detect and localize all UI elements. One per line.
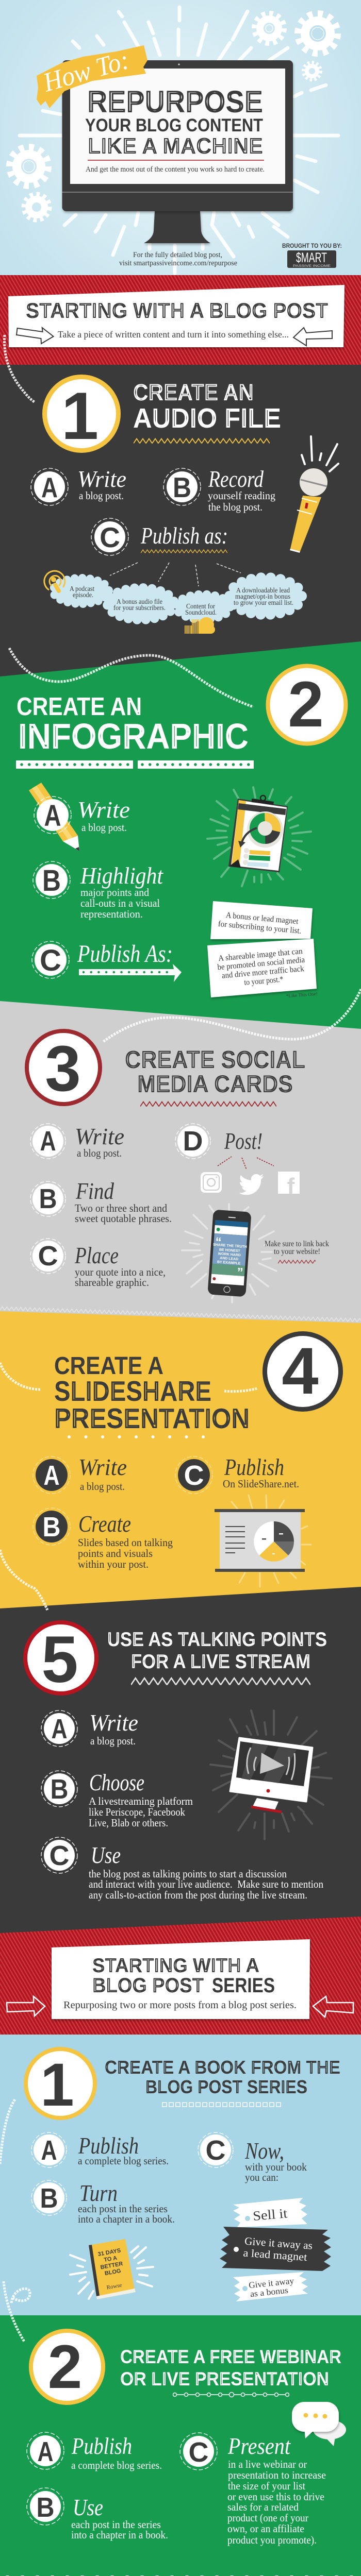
step C: use: any calls-to-action from the post during the live stream.: [89, 1889, 307, 1901]
heading: create a: CREATE A: [54, 1352, 163, 1380]
step A: write: [30, 1123, 124, 1159]
icon: smartphone with quote card: BY EXAMPLE: [217, 1260, 241, 1266]
icon: computer monitor: [62, 60, 293, 243]
heading: series: SERIES: [212, 1974, 275, 1997]
white banner card: [52, 1939, 310, 2019]
badge: number 1: [44, 377, 119, 453]
icon: smartphone with quote card: SHARE THE TRUTH: [213, 1243, 247, 1249]
step B: choose: A livestreaming platform: [89, 1795, 193, 1807]
heading: How To: How To:: [40, 45, 133, 98]
icon: soundcloud: [185, 617, 215, 634]
text: blog post link: [119, 251, 237, 267]
step B: create: Create: [78, 1511, 131, 1537]
step B: create: B: [42, 1512, 61, 1543]
step D: post: [175, 1124, 274, 1170]
step B: highlight: major points and: [80, 886, 149, 899]
step B: find: sweet quotable phrases.: [75, 1212, 172, 1225]
icon: small gear right: [303, 62, 321, 80]
step A: write: Write: [77, 796, 130, 823]
heading: audio file: AUDIO FILE: [133, 403, 281, 434]
icon: rays behind phone: [182, 1204, 276, 1302]
step A: write: Write: [75, 1123, 124, 1149]
step B: create: within your post.: [78, 1558, 149, 1570]
white banner card: [8, 285, 344, 347]
step C: use: and interact with your live audience. Make sure to mention: [89, 1878, 323, 1890]
logo: Smart Passive Income: PASSIVE INCOME: [293, 265, 331, 268]
icon: facebook: [278, 1172, 300, 1199]
step C: now: C: [205, 2135, 226, 2166]
badge: number 1: 1: [61, 378, 99, 453]
heading: starting with a blog post: STARTING WITH A BLOG POST: [26, 298, 328, 323]
cloud: soundcloud content: Content for: [186, 603, 215, 611]
step B: record: Record: [208, 466, 264, 492]
card: bonus or lead magnet: [210, 901, 313, 939]
icon: facebook: f: [287, 1174, 295, 1199]
icon: smartphone with quote card: WORK HARD: [218, 1252, 241, 1258]
step A: publish: Publish: [78, 2132, 139, 2159]
icon: podcast: [44, 571, 65, 591]
text: banner subtitle: Repurposing two or more posts from a blog post series.: [63, 1999, 297, 2011]
step C: publish: On SlideShare.net.: [223, 1478, 299, 1490]
step C: present: sales for a related: [227, 2501, 299, 2513]
icon: gear lower left: [24, 194, 50, 220]
connector: dotted chain to step 2: [9, 648, 253, 707]
panel: step 4 create a slideshare presentation: [0, 1333, 340, 1610]
step C: place: Place: [74, 1242, 119, 1268]
step C: publish: C: [184, 1460, 204, 1491]
arrow: right pointing: [17, 328, 54, 344]
step A: publish: A: [41, 2135, 57, 2166]
step B: use: B: [36, 2492, 55, 2523]
cloud: downloadable lead magnet: to grow your email list.: [234, 599, 293, 607]
icon: smartphone with quote card: BE HONEST: [219, 1248, 241, 1253]
heading: create a book from the: CREATE A BOOK FROM THE: [105, 2057, 340, 2078]
icon: book: BETTER: [100, 2261, 123, 2271]
step B: find: B: [39, 1183, 57, 1214]
step A: write: a blog post.: [90, 1735, 136, 1747]
step C: present: Present: [227, 2433, 291, 2459]
badge: number 5: [25, 1622, 96, 1697]
step A: write: a blog post.: [81, 821, 127, 834]
card: shareable image: and drive more traffic back: [221, 964, 304, 980]
step A: write: A: [41, 471, 58, 503]
heading: for a live stream: FOR A LIVE STREAM: [131, 1651, 310, 1673]
step A: write: a blog post.: [79, 489, 124, 502]
step D: post: D: [183, 1126, 203, 1157]
logo: Smart Passive Income: $MART: [296, 250, 327, 265]
step A: write: [34, 796, 130, 834]
tag: give it away as a lead magnet: [220, 2227, 331, 2271]
step C: present: [180, 2433, 326, 2546]
step B: use: each post in the series: [71, 2518, 161, 2531]
heading: or live presentation: OR LIVE PRESENTATION: [120, 2368, 329, 2389]
step B: choose: Live, Blab or others.: [89, 1817, 168, 1829]
text: tagline: And get the most out of the content you work so hard to create.: [86, 165, 265, 174]
icon: pencil: [29, 783, 79, 851]
step C: now: you can:: [245, 2171, 278, 2183]
icon: rays behind video monitor: [210, 1710, 332, 1839]
step C: publish: Publish: [224, 1454, 284, 1480]
icon: projector screen with pie chart: [215, 1509, 305, 1572]
step B: find: Two or three short and: [75, 1202, 167, 1214]
cloud: soundcloud content: [176, 595, 230, 619]
step A: publish: [27, 2432, 162, 2471]
icon: speech bubbles: [292, 2402, 346, 2446]
step C: publish as: [32, 940, 173, 978]
heading: create social: CREATE SOCIAL: [125, 1046, 305, 1074]
panel: hero header: [10, 7, 342, 273]
step B: record: the blog post.: [208, 501, 262, 513]
step B: choose: Choose: [89, 1769, 144, 1795]
step A: write: [41, 1709, 138, 1747]
icon: gear top right: [298, 14, 337, 53]
text: brought to you by: BROUGHT TO YOU BY:: [282, 242, 342, 249]
card: shareable image: A shareable image that can: [218, 947, 303, 963]
arrow: left pointing: [313, 1996, 353, 2017]
step A: publish: a complete blog series.: [71, 2459, 162, 2471]
card: bonus or lead magnet: A bonus or lead magnet: [225, 911, 299, 926]
icon: smartphone with quote card: AND LEAD: [220, 1257, 238, 1261]
step C: use: [41, 1837, 323, 1901]
step A: publish: a complete blog series.: [78, 2155, 169, 2167]
connector: dashed lines to clouds: [110, 563, 241, 586]
step B: use: Use: [73, 2494, 103, 2520]
step C: place: your quote into a nice,: [75, 1266, 166, 1278]
tag: give it away as a lead magnet: Give it away as: [244, 2235, 313, 2252]
step C: publish as: C: [40, 944, 61, 977]
step C: present: in a live webinar or: [228, 2458, 307, 2470]
step B: highlight: Highlight: [80, 862, 163, 889]
icon: book: [89, 2239, 136, 2299]
step C: present: presentation to increase: [228, 2469, 326, 2481]
icon: twitter: [239, 1174, 264, 1195]
heading: presentation: PRESENTATION: [54, 1402, 250, 1434]
step B: turn: Turn: [79, 2180, 118, 2206]
step B: record: [163, 466, 275, 513]
step B: create: points and visuals: [78, 1547, 153, 1560]
panel: step 2 create an infographic: [16, 666, 361, 1042]
step A: publish: A: [37, 2436, 54, 2467]
step A: write: Write: [89, 1709, 138, 1736]
heading: use as talking points: USE AS TALKING POINTS: [107, 1629, 327, 1651]
icon: smartphone with quote card: [207, 1210, 252, 1297]
badge: number 2: [268, 666, 346, 744]
step A: write: A: [44, 799, 61, 833]
step C: now: [198, 2132, 307, 2183]
badge: number 3: 3: [45, 1033, 81, 1105]
cloud: soundcloud content: Soundcloud.: [185, 609, 217, 617]
step B: create: Slides based on talking: [78, 1536, 173, 1549]
arrow: left pointing: [293, 328, 332, 346]
step D: post: Post!: [224, 1128, 262, 1154]
heading: blog post: BLOG POST: [92, 1974, 204, 1997]
step C: present: product (one of your: [227, 2512, 308, 2524]
connector: dotted chain: [5, 335, 35, 402]
step B: choose: like Periscope, Facebook: [89, 1806, 185, 1818]
step C: now: Now,: [244, 2138, 284, 2164]
step A: publish: Publish: [71, 2433, 132, 2459]
text: banner subtitle: Take a piece of written content and turn it into something else...: [58, 329, 289, 340]
icon: rays behind clipboard: [207, 787, 311, 886]
cloud: podcast episode: A podcast: [70, 585, 94, 593]
step A: publish: [31, 2132, 169, 2167]
step C: present: C: [189, 2437, 208, 2468]
step C: use: Use: [91, 1842, 121, 1868]
badge: number 1: [26, 2049, 95, 2119]
badge: number 2: 2: [288, 669, 324, 740]
tag: sell it: [233, 2198, 307, 2227]
divider: dotted white bars: [16, 760, 254, 769]
badge: number 4: 4: [282, 1334, 319, 1408]
tag: give it away as a bonus: as a bonus: [250, 2285, 289, 2299]
step A: write: Write: [77, 466, 126, 492]
step C: present: own, or an affiliate: [227, 2522, 304, 2535]
step C: publish: [175, 1454, 299, 1494]
step C: present: or even use this to drive: [227, 2490, 324, 2503]
card: shareable image: [207, 939, 317, 997]
step C: now: with your book: [245, 2161, 307, 2173]
step B: turn: into a chapter in a book.: [78, 2213, 175, 2225]
icon: book: Rowse: [106, 2282, 122, 2291]
heading: starting with a: STARTING WITH A: [92, 1955, 259, 1977]
step C: publish as: C: [100, 521, 120, 553]
step B: highlight: B: [42, 864, 61, 897]
icon: video monitor with play button: [230, 1738, 313, 1812]
step B: choose: [41, 1769, 193, 1829]
heading: infographic: INFOGRAPHIC: [18, 716, 249, 756]
connector: dotted chains: [0, 1363, 257, 1610]
divider: square chain: [162, 2102, 283, 2107]
step A: write: A: [40, 1126, 56, 1157]
step B: turn: each post in the series: [78, 2202, 168, 2215]
cloud: podcast episode: episode.: [73, 591, 93, 599]
icon: book: BLOG: [104, 2268, 121, 2277]
step C: present: product you promote).: [227, 2534, 317, 2546]
step C: use: C: [50, 1840, 69, 1871]
connector: dotted chain: [0, 2099, 15, 2164]
step B: choose: B: [51, 1774, 68, 1805]
step B: turn: B: [40, 2183, 58, 2214]
divider: ring dots: [69, 1435, 204, 1438]
icon: gear top center: [254, 13, 284, 43]
panel: step 3 create social media cards: [0, 1031, 360, 1323]
icon: white radiating rays: [20, 7, 338, 273]
icon: rays around book: [70, 2246, 153, 2299]
step B: find: [30, 1178, 172, 1225]
tag: give it away as a bonus: [233, 2272, 308, 2301]
title: your blog content: YOUR BLOG CONTENT: [85, 115, 263, 135]
badge: number 5: 5: [41, 1623, 78, 1697]
cloud: podcast episode: [53, 578, 109, 604]
panel: step 1 create an audio file: [5, 335, 338, 707]
badge: number 4: [265, 1333, 340, 1410]
cloud: downloadable lead magnet: magnet/opt-in bonus: [235, 593, 290, 601]
badge: number 3: [27, 1031, 100, 1105]
icon: smartphone with quote card: “: [215, 1235, 222, 1249]
icon: book: TO A: [104, 2255, 118, 2263]
heading: slideshare: SLIDESHARE: [54, 1375, 211, 1407]
icon: smartphone with quote card: ”: [236, 1265, 243, 1280]
icon: gear left: [10, 147, 48, 185]
text: like this one note: *Like This One!: [286, 991, 318, 998]
divider: ring chain: [173, 2393, 289, 2397]
text: blog post link: For the fully detailed blog post,: [133, 251, 222, 259]
logo: Smart Passive Income: [287, 250, 336, 268]
icon: rays behind projector screen: [232, 1495, 311, 1587]
card: shareable image: to your post.*: [244, 975, 284, 987]
badge: number 1: 1: [40, 2051, 74, 2119]
cloud: bonus audio file: [107, 588, 174, 620]
icon: clipboard with chart: [228, 795, 288, 872]
step A: write: A: [52, 1714, 67, 1744]
panel: starting with a blog post banner: [8, 285, 344, 347]
step A: write: Write: [78, 1454, 127, 1480]
panel: starting with a blog post series banner: [7, 1939, 353, 2019]
cloud: bonus audio file: A bonus audio file: [117, 598, 162, 606]
step B: record: B: [173, 471, 191, 503]
title: like a machine: LIKE A MACHINE: [88, 133, 263, 159]
step A: write: a blog post.: [77, 1147, 122, 1159]
heading: media cards: MEDIA CARDS: [137, 1070, 293, 1097]
step B: highlight: [33, 861, 163, 920]
badge: number 2: [31, 2331, 103, 2403]
icon: book: 31 DAYS: [97, 2247, 121, 2258]
text: blog post link: visit smartpassiveincome.com/repurpose: [119, 259, 237, 267]
step C: present: the size of your list: [228, 2480, 305, 2492]
step A: write: a blog post.: [80, 1480, 125, 1493]
panel: step 5 use as talking points for a live stream: [25, 1622, 332, 1901]
step C: place: [30, 1239, 166, 1289]
cloud: downloadable lead magnet: [229, 578, 302, 615]
step C: publish as: Publish As:: [77, 940, 173, 968]
panel: series step 1 create a book: [0, 2049, 340, 2342]
step C: place: shareable graphic.: [75, 1276, 149, 1289]
step B: use: into a chapter in a book.: [71, 2529, 168, 2541]
card: shareable image: be promoted on social media: [217, 956, 305, 972]
step B: create: [33, 1508, 173, 1570]
step C: place: C: [38, 1241, 58, 1272]
connector: looping dotted chain: [4, 2281, 30, 2342]
heading: blog post series: BLOG POST SERIES: [145, 2076, 307, 2097]
step A: write: [31, 466, 126, 505]
icon: instagram: [201, 1172, 222, 1193]
arrow: right pointing: [7, 1996, 45, 2016]
heading: create an: CREATE AN: [17, 693, 142, 721]
step B: find: Find: [75, 1178, 114, 1204]
icon: yellow brush banner: [37, 45, 147, 108]
heading: create a free webinar: CREATE A FREE WEBINAR: [120, 2346, 341, 2367]
cloud: downloadable lead magnet: A downloadable lead: [236, 587, 290, 595]
cloud: bonus audio file: for your subscribers.: [113, 604, 166, 612]
step C: publish as: [91, 518, 228, 555]
text: link back note: to your website!: [274, 1247, 320, 1256]
step B: highlight: call-outs in a visual: [80, 897, 160, 909]
step A: write: A: [43, 1460, 60, 1491]
badge: number 2: 2: [48, 2332, 82, 2401]
step C: publish as: Publish as:: [140, 522, 228, 549]
text: link back note: Make sure to link back: [265, 1240, 329, 1248]
step B: turn: [31, 2180, 175, 2225]
tag: sell it: Sell it: [252, 2206, 288, 2224]
icon: microphone: [290, 436, 338, 553]
panel: series step 2 create a free webinar: [0, 2331, 361, 2576]
step B: use: [27, 2488, 168, 2541]
step B: highlight: representation.: [80, 908, 143, 920]
card: bonus or lead magnet: for subscribing to your list.: [218, 920, 302, 936]
step A: write: [33, 1454, 127, 1494]
step B: record: yourself reading: [208, 489, 275, 502]
tag: give it away as a lead magnet: a lead magnet: [243, 2246, 307, 2263]
step C: use: the blog post as talking points to start a discussion: [89, 1868, 287, 1880]
title: Repurpose: REPURPOSE: [87, 84, 263, 119]
arrow: dotted bar arrow: [79, 964, 182, 982]
tag: give it away as a bonus: Give it away: [248, 2276, 294, 2290]
connector: dotted chain to step 3: [103, 989, 361, 1042]
heading: create an: CREATE AN: [133, 379, 254, 405]
text: link back note: [265, 1240, 329, 1256]
